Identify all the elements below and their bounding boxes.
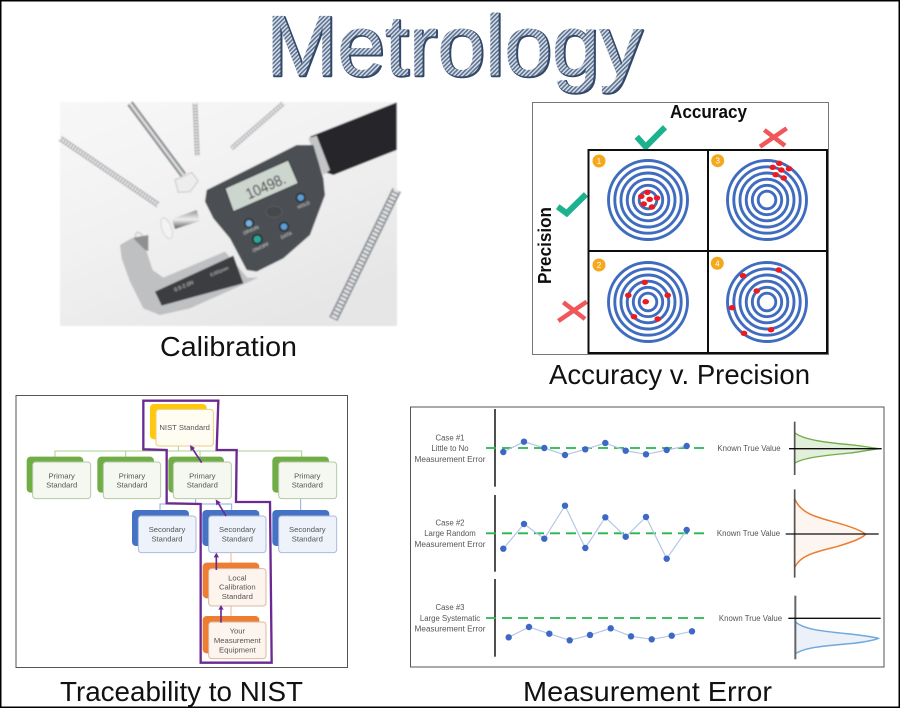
icon: micrometer: ORIGIN: [242, 225, 260, 236]
icon: micrometer: DATA: [280, 230, 294, 240]
target 1: 1: [597, 157, 602, 166]
node: primary standard 4: [272, 457, 337, 499]
case 1 chart: Known True Value: [717, 444, 781, 453]
title: Metrology: [266, 0, 642, 94]
target 2: 2: [597, 261, 602, 270]
case 1 chart: [414, 409, 781, 487]
node: NIST standard: NIST Standard: [159, 423, 210, 432]
node: secondary standard 2: [202, 510, 266, 553]
node: secondary standard 1: Standard: [151, 534, 183, 543]
node: primary standard 1: Primary: [48, 471, 75, 480]
case 3 chart: Large Systematic: [420, 614, 480, 623]
distribution: case 2: [786, 489, 879, 578]
case 3 chart: Known True Value: [719, 614, 782, 623]
node: local calibration standard: Standard: [222, 592, 253, 601]
node: primary standard 3: [168, 457, 231, 499]
caption: measurement error: Measurement Error: [523, 676, 772, 707]
traceability outline: [143, 401, 272, 663]
icon: accuracy check: [637, 127, 665, 147]
icon: micrometer: [120, 102, 397, 315]
icon: micrometer: 10498.: [243, 171, 289, 203]
node: secondary standard 2: Standard: [222, 534, 253, 543]
target 3: [711, 154, 806, 240]
case 1 chart: Little to No: [431, 444, 469, 453]
icon: micrometer: HOLD: [297, 200, 311, 210]
node: secondary standard 3: Standard: [292, 534, 323, 543]
node: secondary standard 2: Secondary: [219, 525, 256, 534]
title: Metrology: [267, 0, 644, 95]
node: primary standard 4: Standard: [292, 481, 323, 490]
case 3 chart: [414, 579, 782, 657]
target 2: [592, 258, 688, 342]
icon: accuracy cross: [760, 128, 787, 147]
node: primary standard 3: Standard: [187, 481, 218, 490]
case 2 chart: Large Random: [424, 529, 476, 538]
target 4: 4: [715, 259, 720, 268]
node: your measurement equipment: [203, 616, 266, 659]
panel: calibration photo: [60, 102, 397, 326]
node: primary standard 1: [27, 457, 91, 499]
node: local calibration standard: [203, 563, 266, 606]
target 4: [711, 257, 806, 342]
case 2 chart: Known True Value: [717, 529, 780, 538]
case 2 chart: Case #2: [435, 518, 465, 528]
node: primary standard 1: Standard: [46, 481, 77, 490]
node: primary standard 2: Primary: [119, 471, 145, 480]
target 1: [592, 154, 688, 240]
node: your measurement equipment: Your: [230, 627, 246, 636]
panel: accuracy vs precision: [532, 102, 828, 354]
caption: traceability: Traceability to NIST: [60, 676, 303, 707]
node: your measurement equipment: Equipment: [219, 645, 257, 654]
case 3 chart: Case #3: [435, 603, 465, 612]
distribution: case 1: [789, 422, 882, 475]
icon: precision cross: [558, 302, 587, 321]
node: local calibration standard: Calibration: [219, 583, 256, 592]
node: your measurement equipment: Measurement: [214, 636, 262, 645]
case 2 chart: [414, 495, 780, 572]
case 2 chart: Measurement Error: [414, 540, 486, 549]
node: primary standard 3: Primary: [189, 471, 216, 480]
node: local calibration standard: Local: [228, 573, 247, 582]
icon: precision check: [558, 194, 586, 213]
arrows: [190, 445, 226, 623]
node: secondary standard 3: Secondary: [289, 525, 326, 534]
icon: micrometer: ON/OFF: [252, 241, 270, 253]
node: primary standard 2: [97, 457, 161, 499]
target grid: [588, 150, 827, 353]
node: NIST standard: [150, 404, 213, 446]
icon: screws: [60, 103, 397, 319]
node: primary standard 2: Standard: [116, 481, 148, 490]
caption: accuracy v. precision: Accuracy v. Precision: [549, 359, 810, 390]
distribution: case 3: [788, 596, 881, 659]
node: secondary standard 1: Secondary: [149, 525, 185, 534]
heading: accuracy: Accuracy: [670, 102, 747, 122]
node: secondary standard 1: [132, 510, 196, 553]
icon: micrometer: 0.001mm: [209, 265, 229, 278]
connector lines: [55, 446, 302, 622]
heading: precision: Precision: [535, 207, 555, 284]
caption: calibration: Calibration: [160, 331, 297, 362]
node: secondary standard 3: [272, 510, 337, 553]
panel: traceability chart: [16, 396, 348, 668]
case 1 chart: Measurement Error: [414, 455, 486, 464]
panel: measurement error: [410, 407, 884, 667]
icon: micrometer: 0.5-2.0N: [173, 280, 195, 294]
case 3 chart: Measurement Error: [414, 624, 486, 634]
case 1 chart: Case #1: [435, 434, 465, 442]
target 3: 3: [715, 157, 720, 166]
node: primary standard 4: Primary: [294, 471, 321, 480]
